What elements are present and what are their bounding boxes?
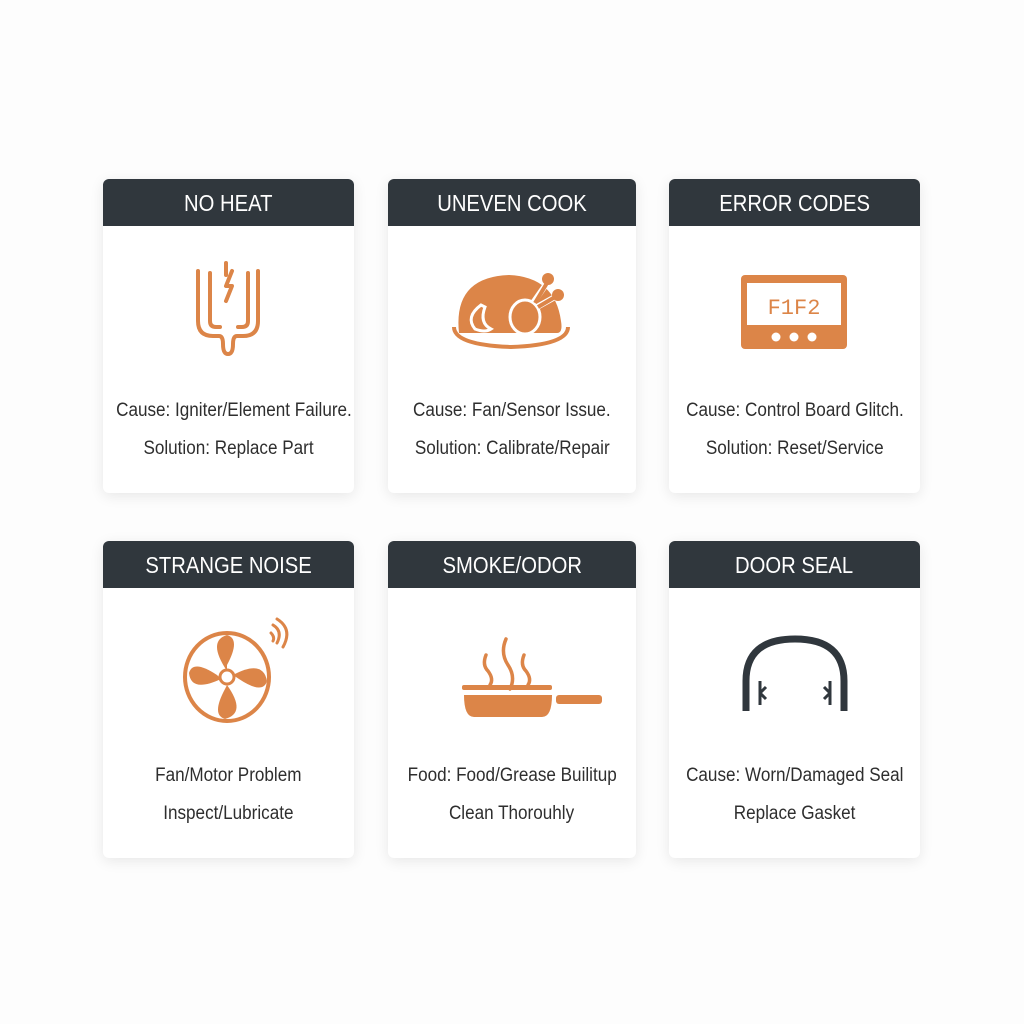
text: door seal: Replace Gasket	[734, 803, 855, 824]
header: strange noise: STRANGE NOISE	[145, 552, 312, 578]
text: no heat: Solution: Replace Part	[143, 438, 314, 459]
text: door seal: Cause: Worn/Damaged Seal	[686, 765, 903, 786]
header: uneven cook: UNEVEN COOK	[437, 190, 587, 216]
header: uneven cook	[388, 179, 636, 226]
icon: roast turkey	[452, 273, 570, 349]
card: smoke odor	[388, 541, 636, 858]
text: smoke odor: Food: Food/Grease Builitup	[407, 765, 617, 786]
card: no heat	[103, 179, 354, 493]
icon: display panel: F1F2	[768, 296, 820, 321]
icon: display panel	[741, 275, 847, 349]
card: uneven cook	[388, 179, 636, 493]
icon: heating element	[196, 261, 260, 356]
header: door seal: DOOR SEAL	[735, 552, 854, 578]
icon: fan with sound	[183, 617, 288, 723]
header: door seal	[669, 541, 920, 588]
text: uneven cook	[413, 400, 611, 459]
header: error codes: ERROR CODES	[719, 190, 870, 216]
header: error codes	[669, 179, 920, 226]
icon: gasket	[742, 636, 848, 711]
text: no heat	[116, 400, 352, 459]
text: uneven cook: Solution: Calibrate/Repair	[415, 438, 609, 459]
text: error codes: Cause: Control Board Glitch.	[686, 400, 903, 421]
icon: smoking pan	[462, 637, 602, 717]
text: error codes: Solution: Reset/Service	[706, 438, 883, 459]
card: strange noise	[103, 541, 354, 858]
text: door seal	[686, 765, 903, 824]
header: strange noise	[103, 541, 354, 588]
text: no heat: Cause: Igniter/Element Failure.	[116, 400, 352, 421]
header: smoke odor: SMOKE/ODOR	[442, 552, 582, 578]
text: strange noise: Inspect/Lubricate	[163, 803, 294, 824]
text: smoke odor: Clean Thorouhly	[449, 803, 575, 824]
header: no heat: NO HEAT	[184, 190, 273, 216]
text: strange noise: Fan/Motor Problem	[155, 765, 302, 786]
card: error codes	[669, 179, 920, 493]
text: smoke odor	[407, 765, 617, 824]
text: uneven cook: Cause: Fan/Sensor Issue.	[413, 400, 611, 421]
text: error codes	[686, 400, 903, 459]
header: no heat	[103, 179, 354, 226]
header: smoke odor	[388, 541, 636, 588]
card: door seal	[669, 541, 920, 858]
text: strange noise	[155, 765, 302, 824]
